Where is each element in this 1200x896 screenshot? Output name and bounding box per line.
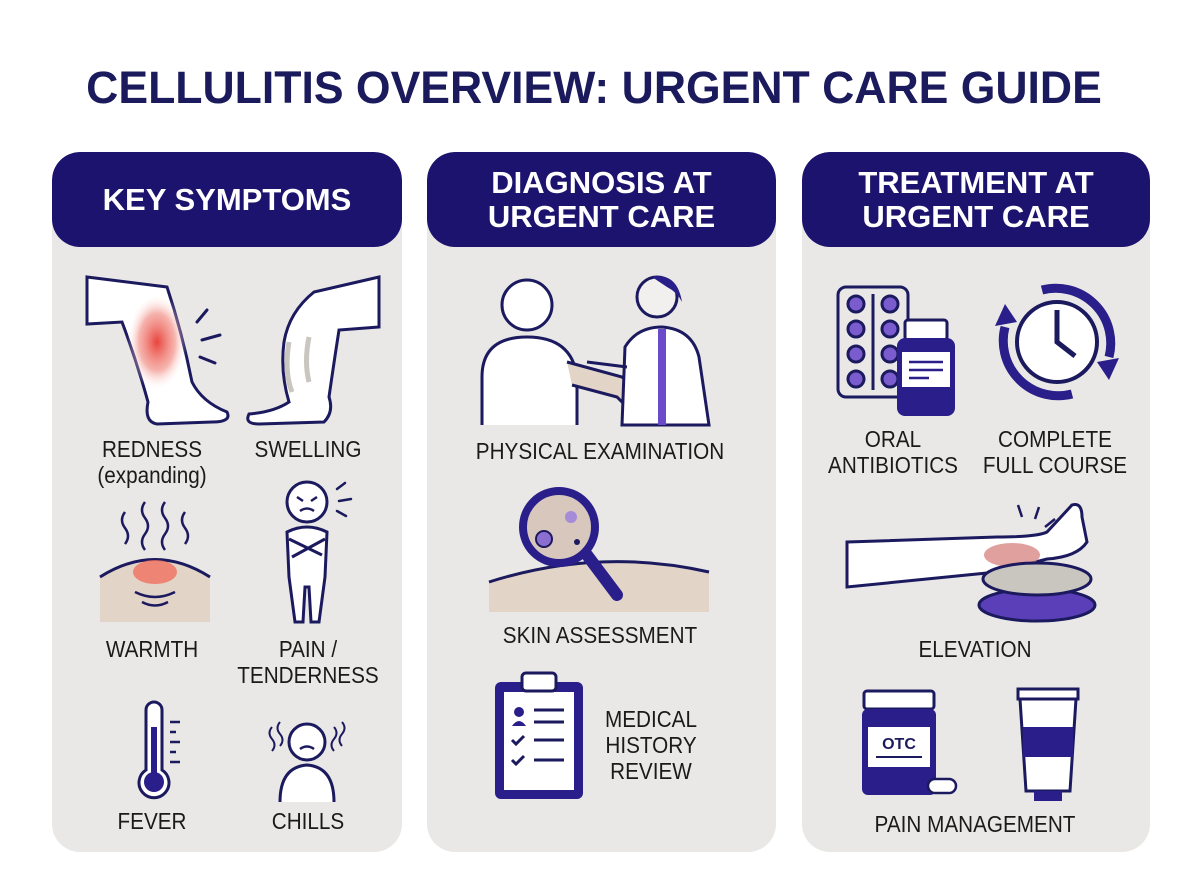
icon: swollen leg bbox=[246, 275, 380, 426]
label: swelling: SWELLING bbox=[255, 436, 361, 462]
icon: pain figure bbox=[285, 480, 352, 624]
icon: antibiotics bbox=[836, 286, 955, 416]
icon: cream tube bbox=[1016, 688, 1080, 801]
heading: diagnosis: DIAGNOSIS AT bbox=[491, 164, 712, 200]
label: pain / tenderness bbox=[237, 636, 379, 688]
icon: clipboard bbox=[495, 672, 583, 799]
heading: key symptoms: KEY SYMPTOMS bbox=[103, 182, 351, 216]
icon: skin assessment bbox=[488, 487, 710, 612]
label: medical history review: HISTORY bbox=[605, 732, 697, 758]
label: redness: (expanding) bbox=[97, 462, 207, 488]
label: elevation: ELEVATION bbox=[918, 636, 1032, 662]
heading: diagnosis: URGENT CARE bbox=[488, 198, 715, 234]
icon: otc bottle bbox=[862, 690, 958, 795]
label: redness bbox=[97, 436, 207, 488]
heading: treatment bbox=[802, 152, 1150, 247]
label: chills: CHILLS bbox=[272, 808, 344, 834]
icon: clock cycle bbox=[995, 284, 1119, 400]
label: complete full course: FULL COURSE bbox=[983, 452, 1127, 478]
heading: treatment: TREATMENT AT bbox=[858, 164, 1094, 200]
label: oral antibiotics: ORAL bbox=[865, 426, 921, 452]
label: complete full course: COMPLETE bbox=[998, 426, 1112, 452]
icon: physical exam bbox=[480, 276, 711, 426]
label: complete full course bbox=[983, 426, 1127, 478]
label: physical examination: PHYSICAL EXAMINATION bbox=[476, 438, 724, 464]
label: medical history review: REVIEW bbox=[610, 758, 692, 784]
panel: treatment bbox=[802, 152, 1150, 852]
label: oral antibiotics bbox=[828, 426, 958, 478]
label: fever: FEVER bbox=[117, 808, 187, 834]
icon: chills bbox=[268, 721, 346, 802]
label: medical history review bbox=[605, 706, 697, 784]
label: skin assessment: SKIN ASSESSMENT bbox=[503, 622, 697, 648]
icon: warmth bbox=[99, 501, 211, 622]
label: redness: REDNESS bbox=[102, 436, 202, 462]
panel: diagnosis bbox=[427, 152, 776, 852]
icon: leg elevation bbox=[846, 503, 1096, 622]
label: oral antibiotics: ANTIBIOTICS bbox=[828, 452, 958, 478]
heading: diagnosis bbox=[427, 152, 776, 247]
icon: otc bottle: OTC bbox=[882, 736, 916, 753]
icon: thermometer bbox=[138, 700, 180, 800]
title: CELLULITIS OVERVIEW: URGENT CARE GUIDE bbox=[86, 62, 1102, 113]
label: warmth: WARMTH bbox=[106, 636, 198, 662]
label: pain management: PAIN MANAGEMENT bbox=[875, 811, 1075, 837]
label: pain / tenderness: PAIN / bbox=[279, 636, 337, 662]
icon: red leg bbox=[86, 275, 230, 426]
heading: treatment: URGENT CARE bbox=[862, 198, 1090, 234]
label: pain / tenderness: TENDERNESS bbox=[237, 662, 379, 688]
panel: key symptoms bbox=[52, 152, 402, 852]
heading: key symptoms bbox=[52, 152, 402, 247]
label: medical history review: MEDICAL bbox=[605, 706, 697, 732]
